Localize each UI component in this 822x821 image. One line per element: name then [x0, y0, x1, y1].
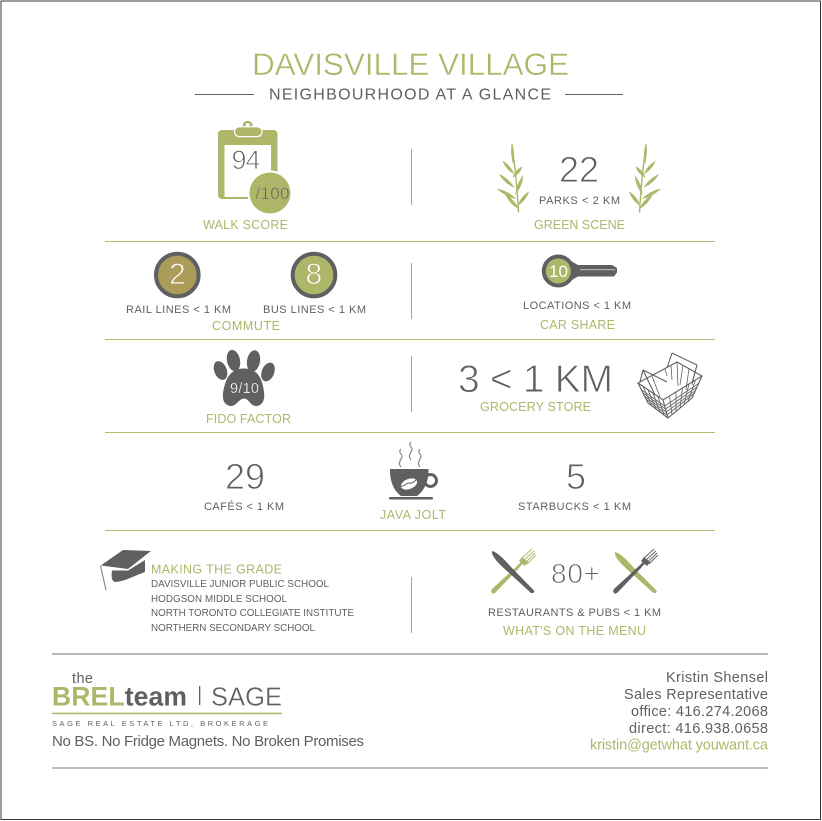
- label: FIDO FACTOR: [206, 412, 291, 426]
- parks number: 22: [559, 149, 599, 190]
- rail caption: RAIL LINES < 1 KM: [126, 304, 231, 316]
- contact details: [590, 670, 769, 754]
- icon: key: [544, 256, 617, 286]
- icon: coffee cup: [389, 442, 436, 500]
- icon: graduation cap: [100, 550, 151, 590]
- icon: bus circle: [293, 254, 335, 296]
- logo: the BREL team | SAGE: [52, 671, 282, 714]
- contact details: Sales Representative: [624, 687, 768, 703]
- contact details: office: 416.274.2068: [631, 704, 768, 720]
- panel: commute: [126, 254, 366, 333]
- contact details: direct: 416.938.0658: [629, 721, 768, 737]
- contact details: Kristin Shensel: [666, 670, 768, 686]
- parks caption: PARKS < 2 KM: [539, 195, 620, 207]
- title: DAVISVILLE VILLAGE: [252, 46, 569, 82]
- label: JAVA JOLT: [380, 508, 446, 522]
- brokerage line: SAGE REAL ESTATE LTD, BROKERAGE: [52, 719, 268, 728]
- school list: NORTH TORONTO COLLEGIATE INSTITUTE: [151, 608, 354, 619]
- logo: the BREL team | SAGE: BRELteam: [52, 682, 187, 712]
- label: GREEN SCENE: [534, 218, 625, 232]
- panel: java jolt: [204, 442, 631, 522]
- score total: /100: [256, 184, 290, 203]
- icon: right branch: [630, 144, 660, 212]
- school list: [151, 579, 354, 634]
- logo: the BREL team | SAGE: the: [72, 671, 93, 687]
- rail number: 2: [169, 258, 186, 291]
- panel: green scene: [498, 144, 660, 232]
- bus caption: BUS LINES < 1 KM: [263, 304, 366, 316]
- label: CAR SHARE: [540, 318, 615, 332]
- icon: wire basket: [638, 353, 702, 418]
- panel: fido factor: [206, 349, 291, 426]
- starbucks caption: STARBUCKS < 1 KM: [518, 501, 631, 513]
- label: MAKING THE GRADE: [151, 562, 282, 576]
- tagline: No BS. No Fridge Magnets. No Broken Promises: [52, 733, 364, 750]
- logo: the BREL team | SAGE: SAGE: [211, 684, 282, 712]
- icon: clipboard: [218, 121, 292, 216]
- school list: NORTHERN SECONDARY SCHOOL: [151, 623, 316, 634]
- school list: DAVISVILLE JUNIOR PUBLIC SCHOOL: [151, 579, 330, 590]
- bus number: 8: [306, 258, 322, 291]
- grocery number: 3 < 1 KM: [458, 358, 613, 401]
- cafes caption: CAFÉS < 1 KM: [204, 500, 284, 513]
- label: WALK SCORE: [203, 218, 288, 232]
- cafes number: 29: [225, 456, 265, 497]
- icon: left cutlery: [491, 549, 536, 594]
- label: COMMUTE: [212, 319, 280, 333]
- contact details: kristin@getwhat youwant.ca: [590, 738, 769, 754]
- car share caption: LOCATIONS < 1 KM: [523, 300, 631, 312]
- panel: car share: [523, 256, 631, 332]
- icon: paw: [211, 349, 277, 406]
- panel: walk score: [203, 121, 292, 232]
- score number: 94: [232, 145, 260, 175]
- car share number: 10: [549, 262, 568, 281]
- starbucks number: 5: [566, 456, 586, 497]
- icon: rail circle: [156, 254, 199, 296]
- panel: making the grade: [100, 550, 354, 634]
- subtitle: NEIGHBOURHOOD AT A GLANCE: [269, 86, 551, 104]
- label: GROCERY STORE: [480, 400, 591, 414]
- restaurants number: 80+: [551, 558, 600, 589]
- panel: grocery store: [458, 353, 702, 418]
- icon: left branch: [498, 144, 528, 212]
- panel: what's on the menu: [488, 549, 661, 638]
- label: WHAT'S ON THE MENU: [503, 624, 646, 638]
- paw score: 9/10: [230, 381, 259, 397]
- school list: HODGSON MIDDLE SCHOOL: [151, 594, 288, 605]
- restaurants caption: RESTAURANTS & PUBS < 1 KM: [488, 607, 661, 619]
- icon: right cutlery: [613, 549, 658, 594]
